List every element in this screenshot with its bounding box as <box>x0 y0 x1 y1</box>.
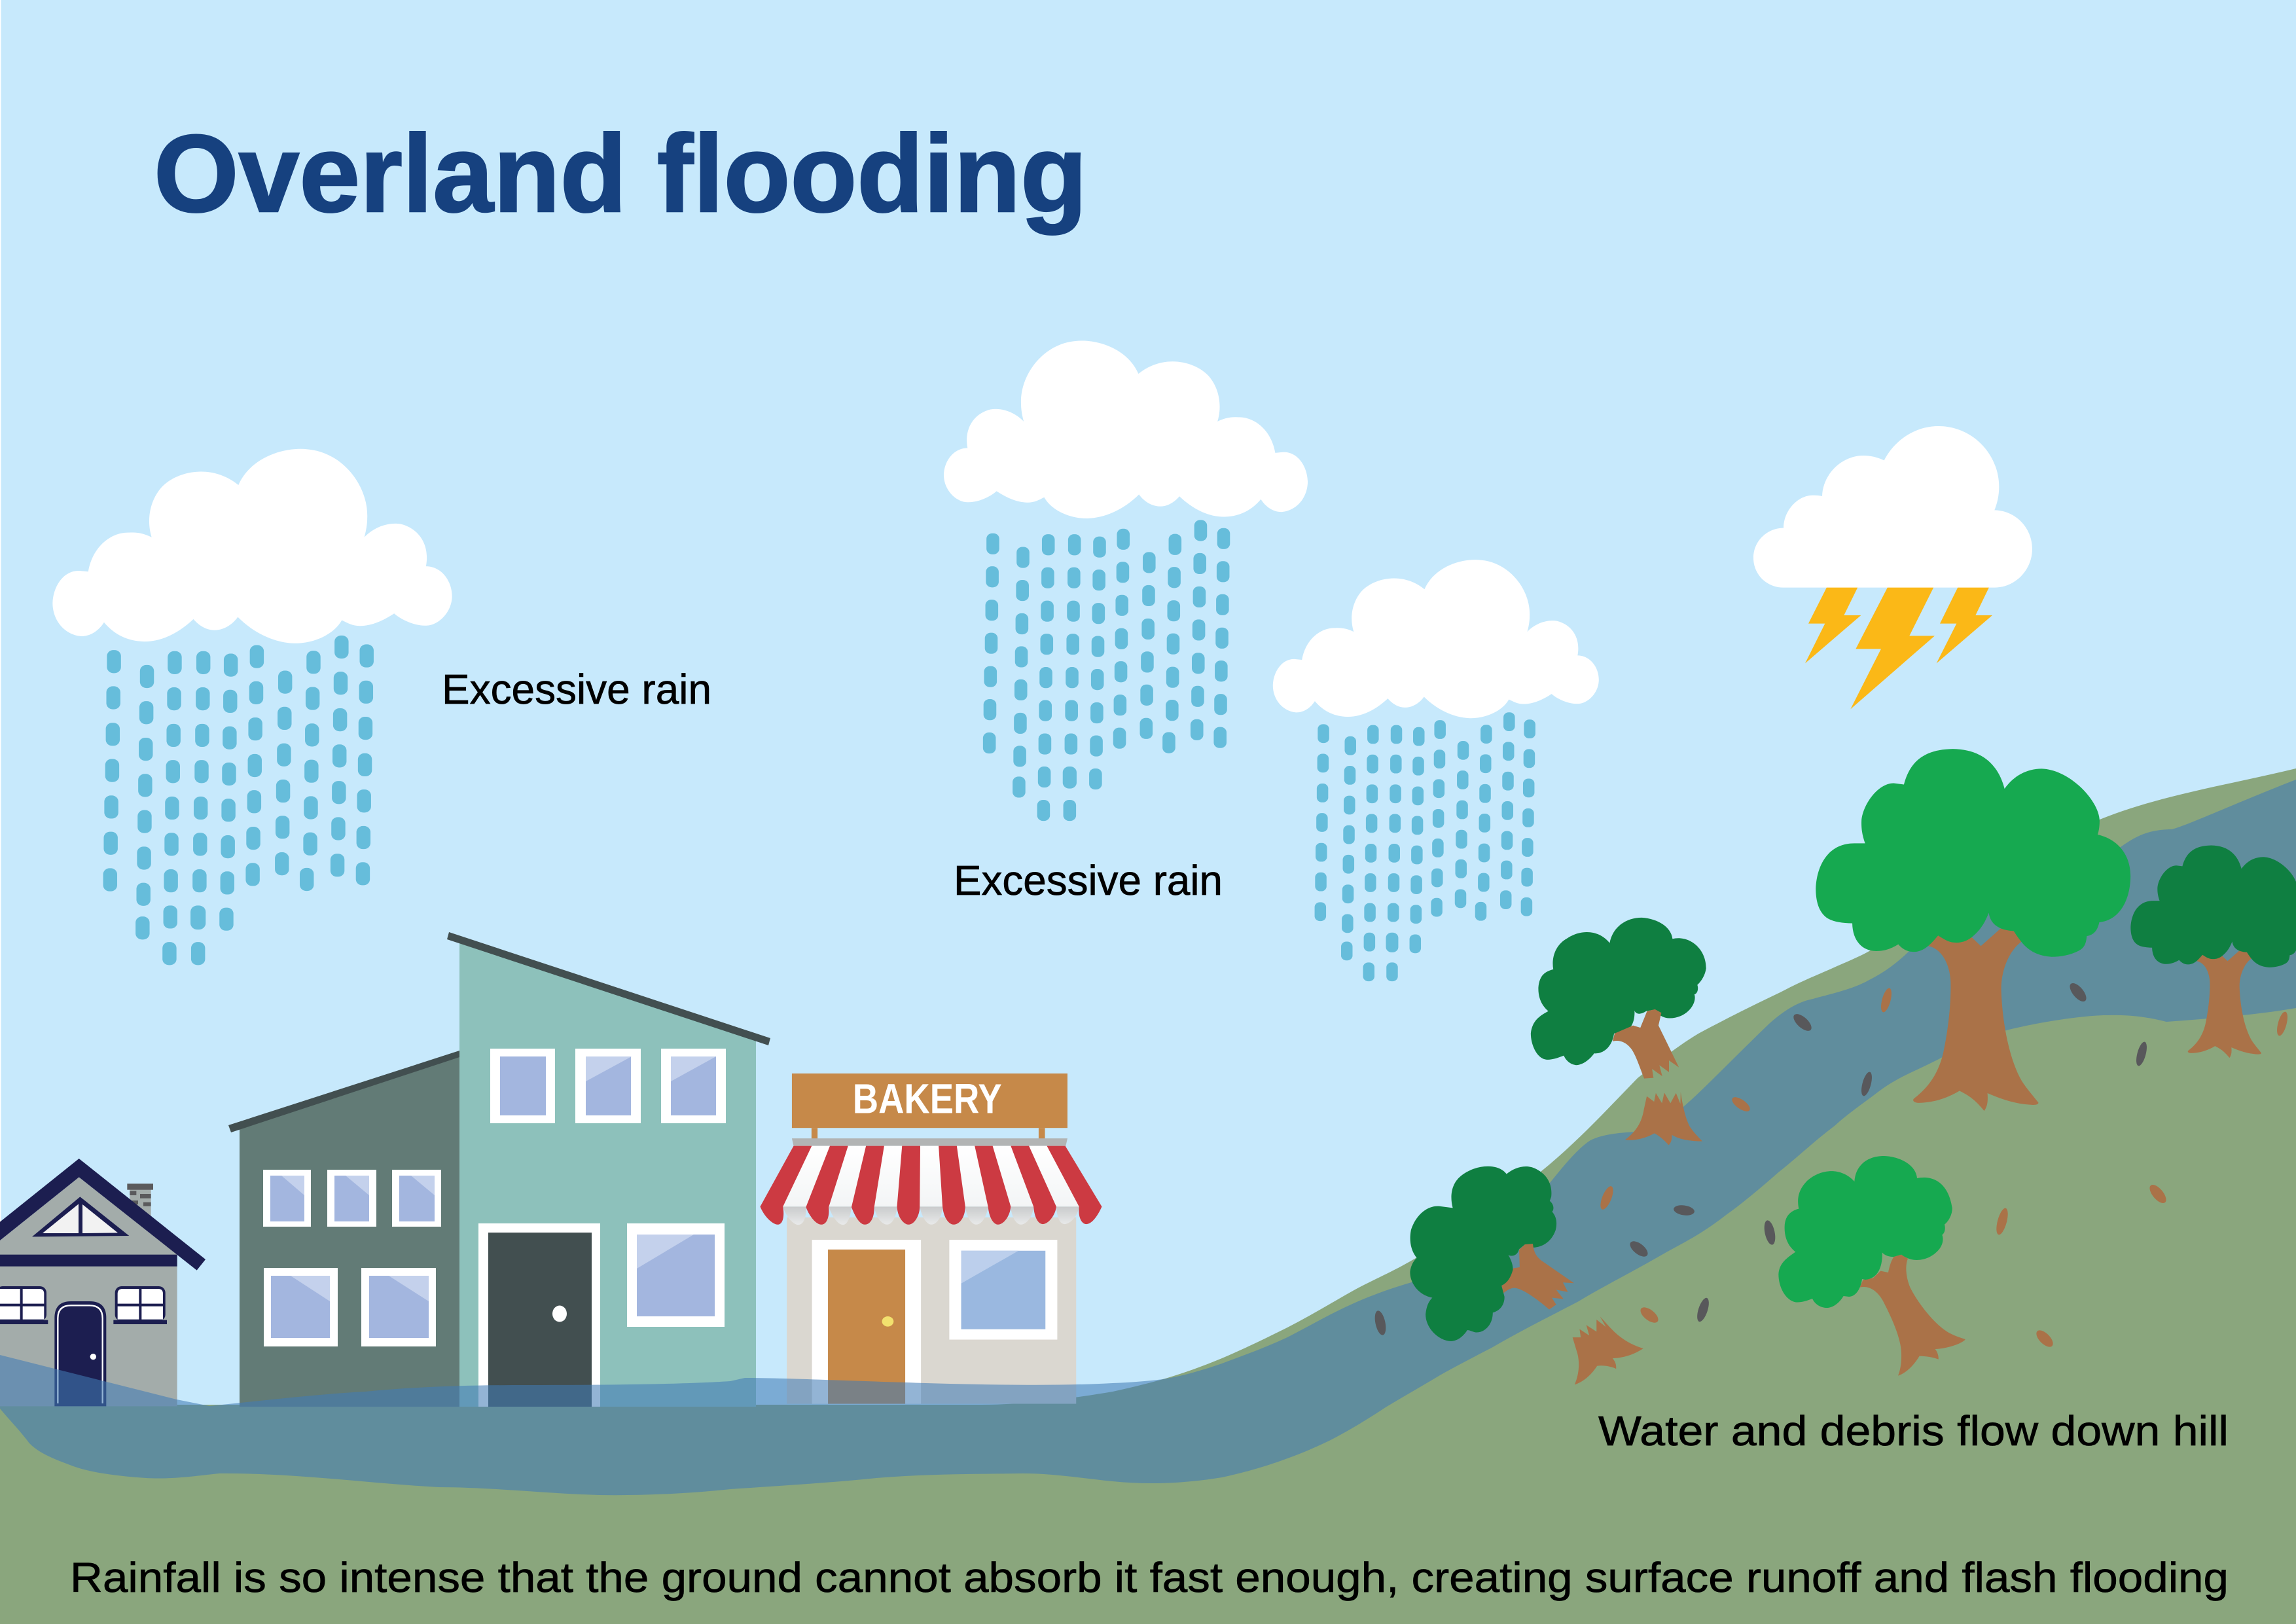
tree: large bright tree on hilltop <box>1816 749 2130 1111</box>
label: water and debris: Water and debris flow down hill <box>1598 1407 2229 1454</box>
storm cloud with lightning <box>1753 426 2032 709</box>
cloud: centre <box>944 341 1308 518</box>
teal block door <box>478 1223 600 1407</box>
teal block upper windows <box>490 1049 726 1123</box>
dark block lower windows <box>264 1268 436 1346</box>
bakery sign <box>792 1074 1067 1140</box>
cloud: left <box>52 449 452 643</box>
flood water <box>0 780 2296 1495</box>
dark block upper windows <box>263 1170 441 1227</box>
rain: left shower <box>103 636 374 965</box>
rain: right shower <box>1315 712 1535 981</box>
cottage wall <box>0 1177 177 1406</box>
gable window <box>32 1197 129 1236</box>
label: excessive rain centre: Excessive rain <box>954 857 1223 904</box>
ground and hill <box>0 768 2296 1624</box>
storm cloud body <box>1753 426 2032 588</box>
chimney <box>127 1183 153 1218</box>
caption: Rainfall is so intense that the ground cannot absorb it fast enough, creating surface runoff and flash flooding <box>70 1554 2229 1601</box>
building: dark green block <box>228 1051 459 1407</box>
teal block roof <box>447 932 770 1045</box>
building: teal block <box>447 932 770 1407</box>
bakery wall <box>787 1218 1076 1404</box>
bakery door <box>812 1240 921 1404</box>
label: excessive rain left: Excessive rain <box>442 666 711 713</box>
cottage roof <box>0 1159 206 1271</box>
teal block lower window <box>627 1223 725 1327</box>
title: Overland flooding <box>154 112 1087 235</box>
bakery sign: BAKERY <box>853 1075 1002 1123</box>
rain: centre shower <box>983 520 1230 821</box>
tree: snapped dark tree upper <box>1531 918 1706 1079</box>
tree: bent bright tree on slope <box>1778 1156 1965 1376</box>
cloud: right <box>1273 560 1599 718</box>
house: small grey cottage <box>0 1159 206 1406</box>
building: bakery shop <box>760 1074 1102 1404</box>
tree: dark tree at right edge <box>2130 845 2296 1058</box>
bakery window <box>949 1240 1057 1340</box>
tree: fallen dark tree lower <box>1410 1166 1574 1341</box>
awning <box>760 1138 1102 1225</box>
debris: brown branches <box>1598 987 2289 1350</box>
lightning bolts <box>1805 587 1992 709</box>
tree stump: lower fallen tree <box>1573 1316 1643 1384</box>
dark block roof <box>228 1051 459 1132</box>
debris: rocks <box>1373 981 2149 1336</box>
cottage right window <box>113 1286 167 1324</box>
cottage left window <box>0 1286 48 1324</box>
tree stump: upper snapped tree <box>1625 1092 1702 1145</box>
cottage door <box>54 1301 106 1406</box>
